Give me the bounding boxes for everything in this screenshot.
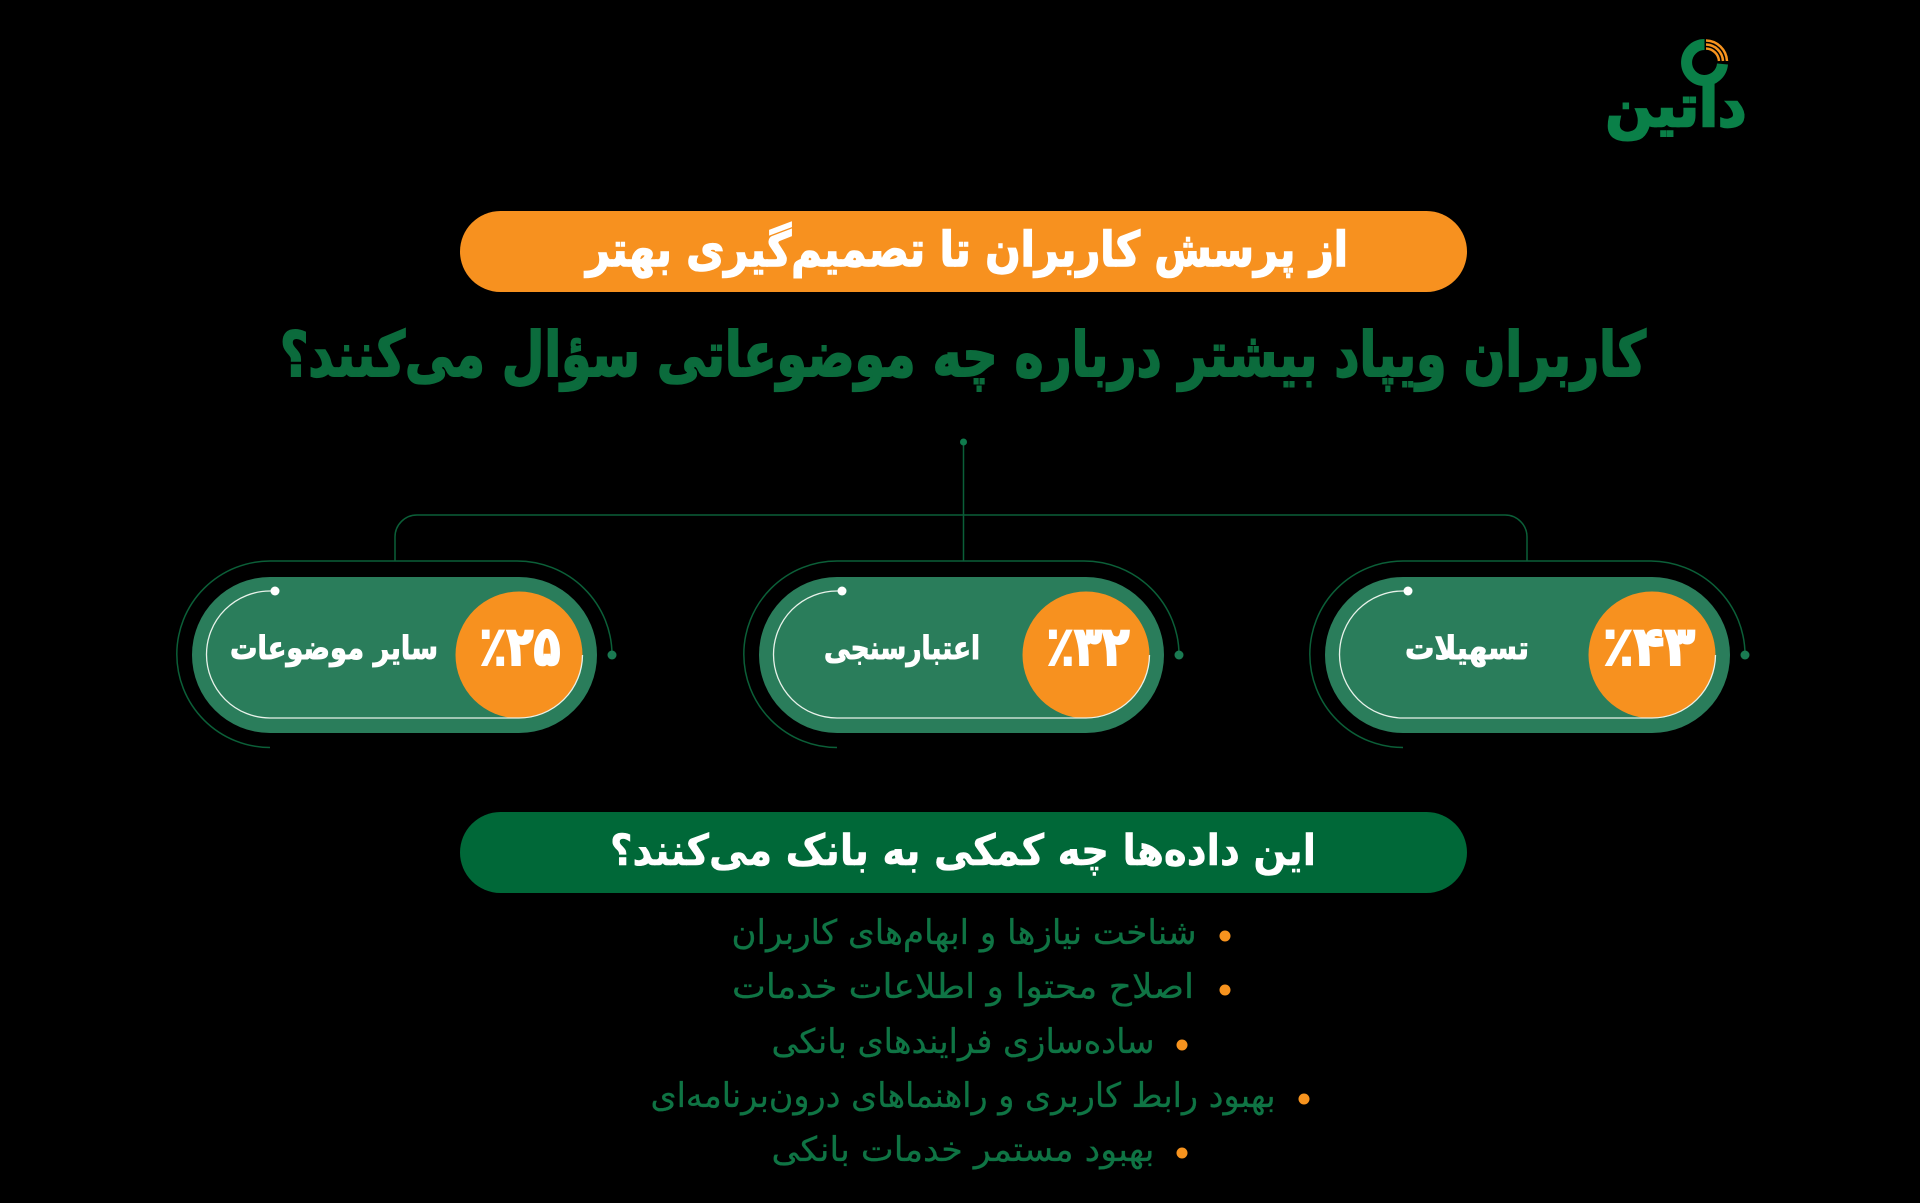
label: اعتبارسنجی — [824, 629, 980, 667]
benefits list — [650, 913, 1310, 1170]
subheading banner — [460, 812, 1467, 893]
item 1: شناخت نیازها و ابهام‌های کاربران — [732, 913, 1196, 953]
percent: ٪۳۲ — [1046, 615, 1130, 678]
item 2: اصلاح محتوا و اطلاعات خدمات — [732, 967, 1194, 1007]
item 5: بهبود مستمر خدمات بانکی — [772, 1130, 1154, 1170]
label: سایر موضوعات — [230, 629, 438, 667]
connector tree — [395, 438, 1527, 561]
logo ring — [1687, 44, 1722, 80]
card: authentication 32% — [744, 561, 1184, 748]
item 3: ساده‌سازی فرایندهای بانکی — [772, 1022, 1154, 1062]
logo wordmark: داتین — [1606, 72, 1746, 141]
label: تسهیلات — [1405, 629, 1529, 667]
logo orange arcs — [1706, 40, 1727, 61]
percent: ٪۴۳ — [1603, 615, 1695, 678]
title banner — [460, 211, 1467, 292]
subheading text: این داده‌ها چه کمکی به بانک می‌کنند؟ — [610, 826, 1316, 876]
title text: از پرسش کاربران تا تصمیم‌گیری بهتر — [584, 222, 1348, 278]
logo — [1606, 40, 1746, 141]
card: loans 43% — [1310, 561, 1750, 748]
card: other topics 25% — [177, 561, 616, 748]
item 4: بهبود رابط کاربری و راهنماهای درون‌برنامه‌ای — [650, 1076, 1276, 1116]
percent: ٪۲۵ — [480, 615, 560, 678]
